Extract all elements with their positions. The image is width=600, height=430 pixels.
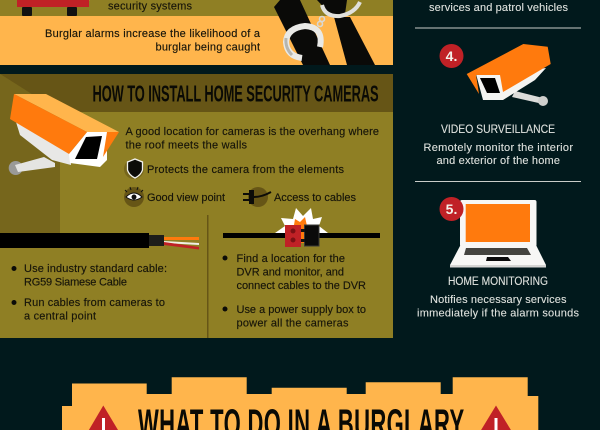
heading: HOW TO INSTALL HOME SECURITY CAMERAS xyxy=(92,81,379,106)
text: access to cables: Access to cables xyxy=(274,192,356,204)
icon: cable xyxy=(0,233,199,250)
text: description: and exterior of the home xyxy=(436,155,560,167)
panel: burglar alarms xyxy=(0,0,393,65)
icon: handcuffed arms xyxy=(274,0,375,65)
icon: shield xyxy=(124,159,144,179)
icon: warning left xyxy=(83,406,124,430)
text: description: Remotely monitor the interior xyxy=(424,142,573,154)
list: dvr tips: power all the cameras xyxy=(236,317,349,329)
text: description xyxy=(424,142,573,167)
list: cable tips: RG59 Siamese Cable xyxy=(24,276,127,288)
text: protects the camera: Protects the camera from the elements xyxy=(147,164,344,176)
list: dvr tips xyxy=(222,253,366,329)
text: location advice: the roof meets the walls xyxy=(126,140,248,152)
icon: eye xyxy=(124,187,144,207)
text: alarms statement: burglar being caught xyxy=(156,42,260,54)
heading: video surveillance: VIDEO SURVEILLANCE xyxy=(441,124,555,136)
banner: what to do in a burglary xyxy=(62,377,538,430)
icon: wall mounted camera xyxy=(9,94,119,175)
list: cable tips xyxy=(12,263,167,322)
list: cable tips: Run cables from cameras to xyxy=(24,297,165,309)
text: alarms statement xyxy=(45,28,261,54)
icon: laptop xyxy=(450,200,546,268)
text: description: Notifies necessary services xyxy=(430,294,567,306)
icon: warning right xyxy=(475,406,517,430)
badge: number 4 xyxy=(440,44,464,68)
icon: cable connector with spark xyxy=(223,208,380,247)
badge: number 5: 5. xyxy=(446,201,457,217)
list: dvr tips: Use a power supply box to xyxy=(236,304,366,316)
text: security systems: security systems xyxy=(108,0,192,12)
icon: red truck xyxy=(17,0,90,16)
list: dvr tips: Find a location for the xyxy=(236,253,345,265)
icon: surveillance camera xyxy=(467,44,551,106)
text: description xyxy=(417,294,580,320)
badge: number 4: 4. xyxy=(446,48,457,64)
text: patrol vehicles: services and patrol vehicles xyxy=(429,2,568,14)
list: cable tips: a central point xyxy=(24,310,96,322)
list: cable tips: Use industry standard cable: xyxy=(24,263,167,275)
text: location advice: A good location for cameras is the overhang where xyxy=(126,126,379,138)
badge: number 5 xyxy=(440,197,464,221)
item 5: home monitoring xyxy=(417,197,580,320)
icon: plug xyxy=(243,187,271,207)
item 4: video surveillance xyxy=(424,44,573,167)
text: alarms statement: Burglar alarms increase the likelihood of a xyxy=(45,28,261,40)
list: dvr tips: DVR and monitor, and xyxy=(236,266,344,278)
text: description: immediately if the alarm sounds xyxy=(417,308,580,320)
text: location advice xyxy=(126,126,379,152)
panel: how to install home security cameras xyxy=(0,74,393,338)
list: dvr tips: connect cables to the DVR xyxy=(236,280,366,292)
text: good view point: Good view point xyxy=(147,192,225,204)
heading: home monitoring: HOME MONITORING xyxy=(448,276,548,288)
